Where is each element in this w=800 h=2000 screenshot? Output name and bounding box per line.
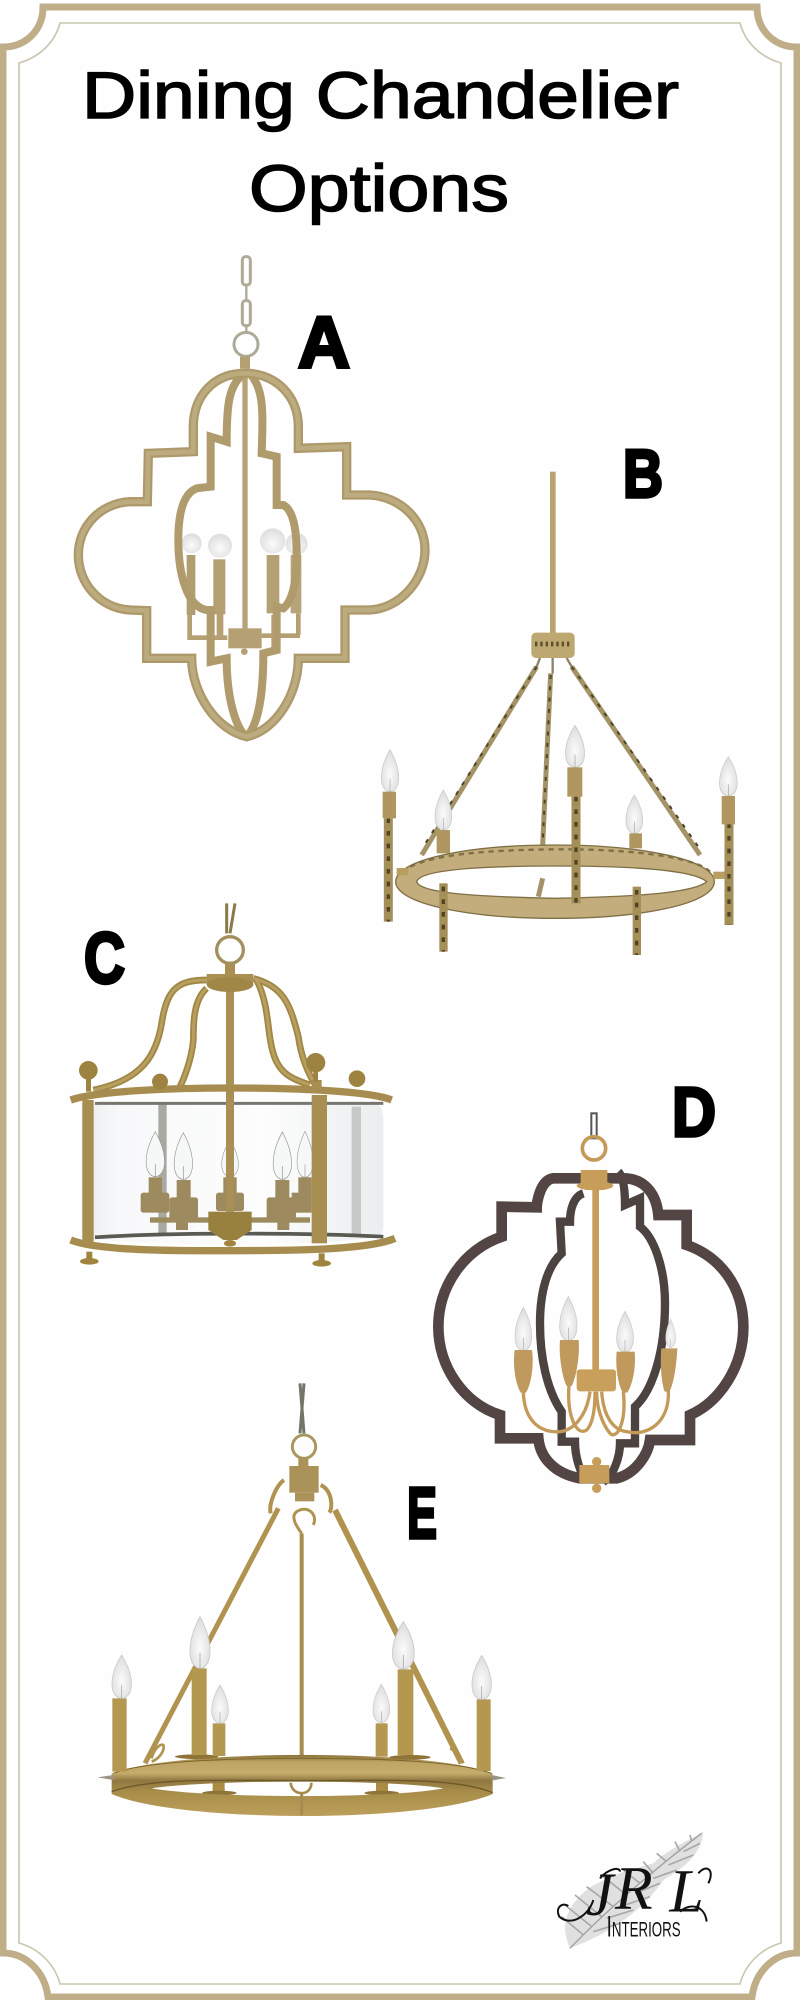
- support arms: [422, 667, 700, 897]
- hanging ring and chain: [217, 903, 243, 963]
- center rod: [242, 372, 248, 630]
- letter D: D: [672, 1073, 716, 1151]
- letter B: B: [623, 436, 663, 512]
- bulbs: [146, 1131, 313, 1179]
- chain and ring: [292, 1383, 316, 1458]
- ball finials: [79, 1053, 365, 1092]
- brass rod and caps: [577, 1170, 613, 1493]
- candle posts: [388, 797, 729, 955]
- rod: [550, 472, 556, 633]
- interiors wordmark: Interiors: [607, 1911, 681, 1944]
- chandelier A: [78, 257, 425, 737]
- hub: [577, 1369, 616, 1391]
- ring: [396, 845, 714, 918]
- bulbs: [515, 1297, 676, 1352]
- script letters: JRL: [586, 1854, 704, 1929]
- cap: [289, 1458, 319, 1501]
- candles: [112, 1668, 491, 1772]
- brass arms: [523, 1385, 668, 1435]
- candle cups and burner: [141, 1177, 312, 1240]
- letter A: A: [298, 303, 350, 383]
- outer dark frame: [438, 1178, 743, 1478]
- chandelier D: [438, 1113, 743, 1493]
- bulbs: [112, 1617, 491, 1723]
- inner frame: [178, 373, 297, 737]
- back candles: [435, 790, 643, 853]
- chandelier B: [381, 472, 737, 955]
- ceiling hub: [531, 633, 575, 673]
- chandelier E: [97, 1383, 506, 1816]
- glass shade: [82, 1103, 383, 1244]
- back candle stubs: [202, 1778, 399, 1795]
- hook and ring: [582, 1113, 606, 1160]
- flourishes: [558, 1869, 711, 1922]
- support arms: [145, 1480, 463, 1763]
- letter E: E: [407, 1474, 437, 1554]
- chandelier C: [71, 903, 395, 1267]
- candles and bulbs: [182, 528, 308, 615]
- arms: [93, 978, 317, 1090]
- ring hook: [291, 1783, 311, 1815]
- letter C: C: [84, 919, 125, 999]
- top and bottom bands: [71, 1088, 395, 1251]
- outer quatrefoil frame: [78, 373, 425, 737]
- feather: [562, 1832, 703, 1948]
- ring: [112, 1755, 493, 1816]
- candle cups: [514, 1340, 677, 1393]
- posts: [82, 1080, 327, 1243]
- back posts and glass edges: [95, 1103, 383, 1237]
- logo: JRL Interiors: [558, 1832, 711, 1948]
- feet: [80, 1240, 331, 1267]
- inner dark frame: [540, 1172, 665, 1482]
- title: Options: [249, 151, 509, 225]
- chain and ring: [234, 257, 258, 356]
- front candles and bulbs: [381, 725, 737, 824]
- title: [82, 58, 679, 225]
- title: Dining Chandelier: [82, 58, 679, 132]
- center rod and hub: [207, 962, 253, 1212]
- hub and arms: [187, 357, 301, 655]
- flanges: [97, 1775, 506, 1781]
